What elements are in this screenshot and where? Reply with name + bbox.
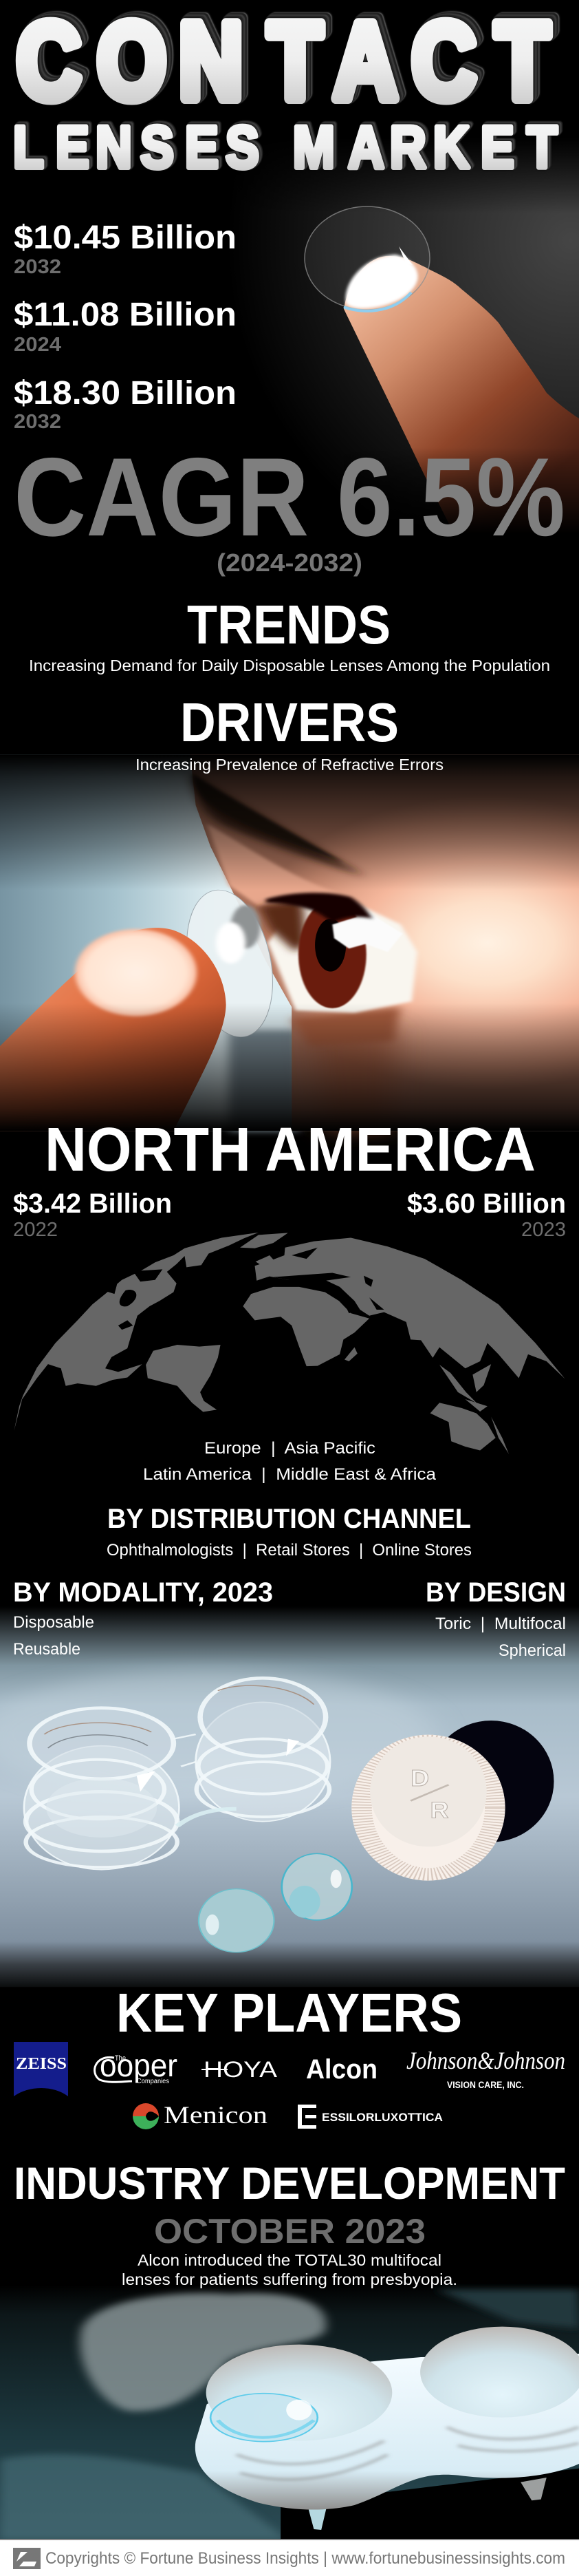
market size stat 2 <box>14 297 237 356</box>
market size stat 1: $10.45 Billion <box>14 220 237 256</box>
by design: Toric | Multifocal <box>435 1615 566 1633</box>
trends section <box>29 594 550 674</box>
market size stat 3 <box>14 375 237 433</box>
white cap with D/R: R <box>430 1798 448 1823</box>
regional heading: North America: NORTH AMERICA <box>45 1116 536 1184</box>
title: CONTACT LENSES MARKET <box>13 0 558 180</box>
logo: Johnson & Johnson Vision Care: VISION CARE, INC. <box>447 2079 524 2090</box>
logo: Zeiss <box>14 2042 68 2096</box>
logo: EssilorLuxottica: ESSILORLUXOTTICA <box>322 2111 443 2124</box>
by modality: Disposable <box>13 1613 94 1632</box>
logo: Menicon: Menicon <box>164 2101 267 2129</box>
white cap with D/R <box>351 1735 505 1881</box>
market size stat 1 <box>14 220 237 278</box>
by distribution channel: Ophthalmologists | Retail Stores | Online Stores <box>107 1541 472 1560</box>
loose lenses <box>199 1853 352 1952</box>
regional stat: 2022: 2022 <box>13 1219 58 1241</box>
by distribution channel: BY DISTRIBUTION CHANNEL <box>107 1504 471 1534</box>
industry development: OCTOBER 2023 <box>154 2212 426 2250</box>
by distribution channel <box>107 1504 472 1560</box>
market size stat 2: 2024 <box>14 334 61 356</box>
logo: The Cooper Companies: ooper <box>100 2047 177 2083</box>
logo: Zeiss: ZEISS <box>16 2055 67 2073</box>
footer bar <box>0 2539 579 2576</box>
region list <box>143 1439 437 1484</box>
trends section: TRENDS <box>187 594 391 655</box>
hero image: fingertip with contact lens <box>0 138 579 533</box>
by design: BY DESIGN <box>426 1577 566 1608</box>
logo: EssilorLuxottica <box>298 2105 443 2129</box>
logo: The Cooper Companies: The <box>115 2054 126 2063</box>
by design <box>426 1577 566 1660</box>
glass case: right well <box>173 1678 330 1826</box>
trends section: Increasing Demand for Daily Disposable Lenses Among the Population <box>29 657 550 674</box>
by modality: BY MODALITY, 2023 <box>13 1577 273 1608</box>
industry development <box>14 2158 565 2250</box>
logo: Menicon <box>133 2101 267 2129</box>
world map <box>14 1233 565 1454</box>
drivers section <box>135 692 444 774</box>
logo: The Cooper Companies: Companies <box>137 2078 169 2085</box>
market size stat 1: 2032 <box>14 256 61 278</box>
logo: Alcon: Alcon <box>306 2054 378 2085</box>
development description: lenses for patients suffering from presbyopia. <box>122 2270 457 2288</box>
regional stat: 2023: 2023 <box>521 1219 566 1241</box>
title: CONTACT LENSES MARKET: LENSES MARKET <box>13 114 558 180</box>
key players heading: KEY PLAYERS <box>116 1982 462 2043</box>
bottom photo: lens in case <box>0 2285 579 2540</box>
lens in well <box>210 2394 318 2442</box>
region list: Europe | Asia Pacific <box>204 1439 375 1458</box>
logo: Johnson & Johnson Vision Care <box>406 2047 565 2090</box>
CAGR headline: (2024-2032) <box>217 549 362 577</box>
by modality <box>13 1577 273 1659</box>
regional stat: 2022 <box>13 1189 172 1241</box>
regional stat: 2022: $3.42 Billion <box>13 1189 172 1219</box>
eye photo: finger placing lens on eye <box>0 755 579 1131</box>
title: CONTACT LENSES MARKET: CONTACT <box>17 0 549 122</box>
glass case: left well <box>24 1708 179 1870</box>
region list: Latin America | Middle East & Africa <box>143 1465 437 1484</box>
market size stat 2: $11.08 Billion <box>14 297 237 333</box>
dark cap <box>428 1721 554 1842</box>
drivers section: Increasing Prevalence of Refractive Errors <box>135 756 444 774</box>
market size stat 3: 2032 <box>14 411 61 433</box>
by design: Spherical <box>499 1641 566 1660</box>
icon: Fortune Business Insights logo <box>13 2548 41 2569</box>
case body <box>195 2327 579 2530</box>
regional stat: 2023: $3.60 Billion <box>407 1189 566 1219</box>
development description <box>122 2251 457 2288</box>
drivers section: DRIVERS <box>180 692 399 753</box>
white cap with D/R: D <box>411 1766 429 1791</box>
lens case photo <box>0 1606 579 1987</box>
by modality: Reusable <box>13 1640 80 1659</box>
regional stat: 2023 <box>407 1189 566 1241</box>
market size stat 3: $18.30 Billion <box>14 375 237 412</box>
development description: Alcon introduced the TOTAL30 multifocal <box>138 2251 441 2269</box>
logo: Hoya: HOYA <box>204 2057 278 2082</box>
